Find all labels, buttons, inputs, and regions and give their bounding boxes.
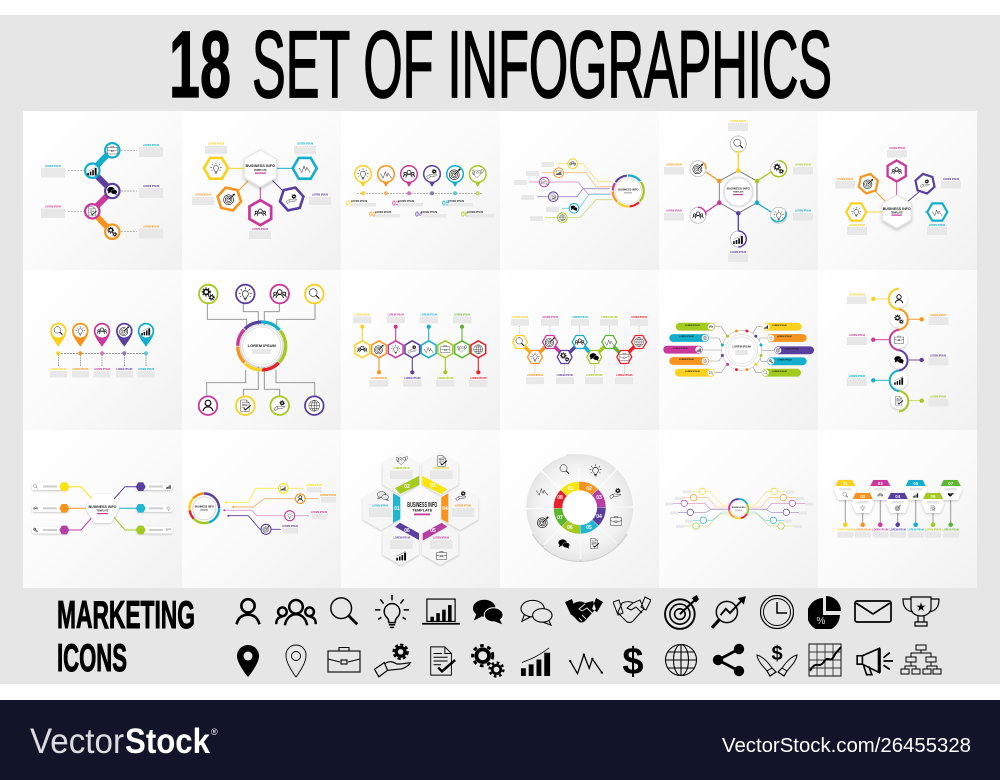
card 07 xyxy=(939,480,962,527)
panel: 1 snake circles xyxy=(23,111,182,270)
hex icons and text: LOREM IPSUM xyxy=(433,468,449,470)
pill labels: LOREM IPSUM xyxy=(685,371,700,373)
node: bars xyxy=(730,231,746,247)
text blocks: LOREM IPSUM xyxy=(889,148,905,150)
donut colored ring xyxy=(558,486,601,529)
sector icons xyxy=(536,464,622,549)
text blocks xyxy=(835,148,961,235)
panel: 7 map pins timeline xyxy=(23,270,182,430)
numbered notes: 04 xyxy=(415,212,423,218)
text blocks: LOREM IPSUM xyxy=(930,356,946,358)
panel: 13 hexagon with six branches xyxy=(23,430,182,588)
numbered notes: LOREM IPSUM xyxy=(375,212,391,214)
text blocks: LOREM IPSUM xyxy=(208,144,224,146)
text blocks: LOREM IPSUM xyxy=(116,369,132,371)
text blocks: LOREM IPSUM xyxy=(872,530,888,532)
hex icons and text xyxy=(369,456,474,560)
text blocks: LOREM IPSUM xyxy=(730,252,746,254)
central ring xyxy=(238,322,286,370)
right nodes xyxy=(770,488,796,529)
pill labels: LOREM IPSUM xyxy=(772,325,787,327)
center hexagon: BUSINESS INFO xyxy=(246,164,275,168)
text blocks xyxy=(837,530,959,538)
left pill bars xyxy=(663,323,715,377)
card 01 xyxy=(834,480,857,527)
text blocks xyxy=(847,294,948,406)
node: purple xyxy=(548,192,558,202)
text blocks: LOREM IPSUM xyxy=(908,530,924,532)
heading: marketing icons xyxy=(57,594,195,680)
text blocks: LOREM IPSUM xyxy=(354,314,370,316)
text blocks: LOREM IPSUM xyxy=(586,375,602,377)
node: zigzag xyxy=(927,203,947,221)
text blocks: LOREM IPSUM xyxy=(297,144,313,146)
node: bulb xyxy=(236,285,255,303)
node: bars xyxy=(85,164,100,178)
text blocks xyxy=(353,314,488,387)
hex icons and text: LOREM IPSUM xyxy=(394,538,410,540)
pin: zigzag xyxy=(378,166,394,195)
pin: bulb xyxy=(72,323,89,355)
panel: 6 hexagon fan xyxy=(818,111,977,270)
logo text: Vector xyxy=(30,722,124,761)
ring numbers: 01 xyxy=(568,486,573,492)
text blocks: LOREM IPSUM xyxy=(195,194,211,196)
white circles with icons xyxy=(890,290,908,409)
panel: 8 central ring with eight nodes xyxy=(182,270,341,430)
center title: TEMPLATE xyxy=(412,508,433,512)
node: team xyxy=(249,200,271,225)
hexagon cluster: 03 xyxy=(430,483,436,489)
panel: 18 hexagon cards with stems xyxy=(818,430,977,588)
pill labels: LOREM IPSUM xyxy=(685,325,700,327)
central ring xyxy=(729,499,748,518)
text blocks: LOREM IPSUM xyxy=(943,179,959,181)
node: target xyxy=(261,524,271,534)
hex icons and text: LOREM IPSUM xyxy=(455,506,471,508)
text blocks: LOREM IPSUM xyxy=(143,186,159,188)
node: bulb xyxy=(285,511,295,521)
node: orange xyxy=(554,168,564,178)
ring numbers: 03 xyxy=(596,495,602,501)
text blocks: LOREM IPSUM xyxy=(666,210,682,212)
center hexagon: BUSINESS INFO xyxy=(883,207,911,211)
node: bulb xyxy=(204,158,228,179)
card numbers: 02 xyxy=(860,494,866,499)
text blocks: LOREM IPSUM xyxy=(371,378,387,380)
text blocks: LOREM IPSUM xyxy=(631,317,647,319)
text blocks xyxy=(514,162,559,221)
node: target xyxy=(856,172,880,195)
text blocks: LOREM IPSUM xyxy=(252,229,268,231)
title xyxy=(169,12,832,118)
node: gears xyxy=(105,224,120,239)
numbered notes: LOREM IPSUM xyxy=(351,201,367,203)
panel: 17 double circuit ring xyxy=(659,430,818,588)
hexagon cluster: 06 xyxy=(404,528,410,534)
panel: 4 circuit lines to ring xyxy=(500,111,659,270)
node: yellow xyxy=(568,159,578,168)
center hexagon: TEMPLATE xyxy=(254,169,267,172)
ring numbers: 02 xyxy=(586,486,592,492)
ring numbers: 04 xyxy=(596,514,602,520)
numbered notes: 02 xyxy=(369,212,377,218)
card numbers: 05 xyxy=(913,481,919,486)
hexagon cluster: 04 xyxy=(442,506,448,512)
logo text: ® xyxy=(211,727,218,737)
card numbers: 07 xyxy=(948,481,954,486)
node: cyan xyxy=(569,204,579,213)
text blocks: LOREM IPSUM xyxy=(50,369,66,371)
numbered notes: LOREM IPSUM xyxy=(448,201,464,203)
node: team xyxy=(888,160,906,182)
hex icons and text: LOREM IPSUM xyxy=(433,538,449,540)
central ring: LOREM IPSUM xyxy=(248,343,276,348)
hex icons and text: LOREM IPSUM xyxy=(394,468,410,470)
text blocks: LOREM IPSUM xyxy=(45,166,61,168)
text blocks: LOREM IPSUM xyxy=(795,164,811,166)
pill labels: LOREM IPSUM xyxy=(777,360,792,362)
hexagon cluster: 05 xyxy=(430,528,436,534)
panel: 15 six white hexagons xyxy=(341,430,500,588)
text blocks: LOREM IPSUM xyxy=(849,376,865,378)
pill labels: LOREM IPSUM xyxy=(784,348,799,350)
donut outer sectors xyxy=(533,468,626,561)
text blocks: LOREM IPSUM xyxy=(601,317,617,319)
text blocks: LOREM IPSUM xyxy=(890,530,906,532)
numbered notes: 03 xyxy=(392,200,400,208)
text blocks: LOREM IPSUM xyxy=(572,317,588,319)
hexagon cluster: 02 xyxy=(404,484,410,490)
center hexagon xyxy=(719,171,757,213)
text blocks: LOREM IPSUM xyxy=(72,369,88,371)
node: team xyxy=(270,285,289,303)
pin: handshake xyxy=(469,166,486,195)
center hexagon xyxy=(86,494,119,523)
hexagon nodes xyxy=(717,168,759,216)
panel: 9 hexagon chain xyxy=(341,270,500,430)
node: document xyxy=(85,204,100,218)
text blocks xyxy=(665,490,813,528)
text blocks: LOREM IPSUM xyxy=(795,210,811,212)
right pills xyxy=(136,482,173,534)
ring numbers: 08 xyxy=(557,495,563,501)
text blocks: LOREM IPSUM xyxy=(320,495,336,497)
panel: 16 segmented donut xyxy=(500,430,659,588)
text blocks: LOREM IPSUM xyxy=(143,145,159,147)
wave arcs xyxy=(889,289,908,412)
card 06 xyxy=(922,493,944,527)
text blocks: LOREM IPSUM xyxy=(930,315,946,317)
central ring xyxy=(613,176,644,206)
card numbers: 03 xyxy=(878,481,883,486)
node: hand xyxy=(278,186,306,212)
panel: 2 hexagon star xyxy=(182,111,341,270)
text blocks: LOREM IPSUM xyxy=(929,225,945,227)
text blocks: LOREM IPSUM xyxy=(404,378,420,380)
node: globe xyxy=(305,396,324,415)
node: gears xyxy=(771,161,787,177)
text blocks: LOREM IPSUM xyxy=(512,317,528,319)
icon row 2 xyxy=(237,641,941,683)
hexagon cluster xyxy=(363,453,478,565)
pill labels: LOREM IPSUM xyxy=(777,336,792,338)
pill labels: LOREM IPSUM xyxy=(673,348,688,350)
pin: target xyxy=(447,166,463,195)
panel: 10 zigzag hexagons xyxy=(500,270,659,430)
text blocks xyxy=(511,317,648,384)
text blocks xyxy=(664,121,813,262)
text blocks xyxy=(192,144,331,239)
text blocks: LOREM IPSUM xyxy=(454,314,470,316)
pin: team xyxy=(94,323,110,355)
node: person xyxy=(296,494,305,504)
text blocks: LOREM IPSUM xyxy=(849,294,865,296)
hex icons and text: LOREM IPSUM xyxy=(372,506,388,508)
node: team xyxy=(690,207,706,223)
icon row 1 xyxy=(237,595,939,631)
node: hand xyxy=(913,172,937,195)
card numbers: 01 xyxy=(843,481,848,486)
pin: bars xyxy=(138,323,154,355)
text blocks: LOREM IPSUM xyxy=(311,512,327,514)
panel: 12 vertical wave circles xyxy=(818,270,977,430)
node: lime xyxy=(558,213,567,222)
text blocks: LOREM IPSUM xyxy=(94,369,110,371)
node: hand xyxy=(270,396,289,415)
central ring: LOREM IPSUM xyxy=(733,344,751,348)
node: target xyxy=(215,186,243,212)
text blocks xyxy=(41,145,163,238)
left pills xyxy=(32,482,69,534)
numbered notes: 05 xyxy=(442,200,450,208)
logo text xyxy=(30,722,218,761)
text blocks: LOREM IPSUM xyxy=(849,225,865,227)
pin: search xyxy=(50,323,67,355)
pill labels: LOREM IPSUM xyxy=(679,359,694,361)
right pill bars xyxy=(762,323,814,377)
text blocks: LOREM IPSUM xyxy=(930,396,946,398)
text blocks: LOREM IPSUM xyxy=(557,375,573,377)
center hexagon: TEMPLATE xyxy=(891,212,903,214)
node: zigzag xyxy=(293,158,317,179)
text blocks: LOREM IPSUM xyxy=(45,206,61,208)
footer stock id: VectorStock.com/26455328 xyxy=(722,735,971,757)
center title xyxy=(407,502,438,515)
text blocks xyxy=(50,369,154,378)
numbered notes xyxy=(346,200,494,218)
panel: 14 ring with four circuit lines xyxy=(182,430,341,588)
node: gears xyxy=(199,285,218,303)
pill labels: LOREM IPSUM xyxy=(679,336,694,338)
hexagon row xyxy=(512,336,646,363)
center hexagon: TEMPLATE xyxy=(96,510,109,512)
numbered notes: 06 xyxy=(461,212,469,218)
text blocks: LOREM IPSUM xyxy=(837,530,853,532)
footer band xyxy=(0,700,1000,780)
panel: 11 ring with pill bars xyxy=(659,270,818,430)
ring numbers: 07 xyxy=(557,515,563,521)
panel: 3 six round pins timeline xyxy=(341,111,500,270)
hexagon row xyxy=(355,341,486,358)
node: search xyxy=(730,136,746,152)
ring numbers xyxy=(557,486,602,531)
node: chat xyxy=(105,184,120,198)
numbered notes: LOREM IPSUM xyxy=(467,212,483,214)
text blocks: LOREM IPSUM xyxy=(925,530,941,532)
numbered notes: 01 xyxy=(346,200,354,208)
node: target xyxy=(690,161,706,177)
pill labels: LOREM IPSUM xyxy=(772,371,787,373)
text blocks: LOREM IPSUM xyxy=(306,485,322,487)
node: briefcase xyxy=(105,143,120,158)
text blocks: LOREM IPSUM xyxy=(849,335,865,337)
text blocks: LOREM IPSUM xyxy=(282,526,298,528)
node: laptop xyxy=(278,484,288,493)
card 03 xyxy=(869,480,892,527)
text blocks: LOREM IPSUM xyxy=(388,314,404,316)
text blocks xyxy=(282,485,336,534)
pin: team xyxy=(401,166,417,195)
card 02 xyxy=(851,493,874,527)
card 05 xyxy=(904,480,927,527)
heading: marketing icons: MARKETING xyxy=(57,594,195,637)
card numbers xyxy=(843,481,954,499)
node: document xyxy=(236,396,255,415)
text blocks: LOREM IPSUM xyxy=(943,530,959,532)
heading: marketing icons: ICONS xyxy=(57,637,127,680)
center hexagon xyxy=(882,195,911,228)
text blocks: LOREM IPSUM xyxy=(421,314,437,316)
center hexagon: BUSINESS INFO xyxy=(89,505,117,509)
text blocks: LOREM IPSUM xyxy=(855,530,871,532)
center hexagon: BUSINESS INFO xyxy=(727,186,751,190)
central ring: BUSINESS INFO xyxy=(195,506,214,508)
node: magenta xyxy=(540,177,549,187)
ring numbers: 05 xyxy=(586,525,592,531)
numbered notes: LOREM IPSUM xyxy=(398,201,414,203)
hexagon cluster: 01 xyxy=(394,506,400,512)
ring numbers: 06 xyxy=(567,525,573,531)
central ring xyxy=(721,330,762,371)
node: bulb xyxy=(771,207,787,223)
center title: BUSINESS INFO xyxy=(407,502,438,509)
title: 18 xyxy=(169,12,231,118)
text blocks: LOREM IPSUM xyxy=(837,179,853,181)
logo text: Stock xyxy=(125,722,210,761)
text blocks: LOREM IPSUM xyxy=(527,375,543,377)
text blocks: LOREM IPSUM xyxy=(616,375,632,377)
node: search xyxy=(305,285,324,303)
text blocks: LOREM IPSUM xyxy=(730,121,746,123)
left nodes xyxy=(681,488,706,529)
text blocks: LOREM IPSUM xyxy=(666,164,682,166)
text blocks: LOREM IPSUM xyxy=(143,226,159,228)
panel: 5 hexagon ring with six nodes xyxy=(659,111,818,270)
central ring: BUSINESS INFO xyxy=(732,507,746,509)
node: bulb xyxy=(846,203,866,221)
center hexagon xyxy=(244,150,276,187)
card numbers: 06 xyxy=(930,494,936,499)
central ring xyxy=(190,494,219,523)
central ring: BUSINESS INFO xyxy=(618,188,638,192)
text blocks: LOREM IPSUM xyxy=(437,378,453,380)
pin: hand xyxy=(424,166,440,195)
pill labels xyxy=(673,325,799,373)
center hexagon: TEMPLATE xyxy=(733,190,744,194)
text blocks: LOREM IPSUM xyxy=(312,194,328,196)
pin: bulb xyxy=(355,166,371,195)
text blocks: LOREM IPSUM xyxy=(542,317,558,319)
text blocks: LOREM IPSUM xyxy=(470,378,486,380)
numbered notes: LOREM IPSUM xyxy=(421,212,437,214)
card numbers: 04 xyxy=(895,494,901,499)
pin: target xyxy=(116,323,133,355)
card 04 xyxy=(886,493,909,527)
text blocks: LOREM IPSUM xyxy=(138,369,154,371)
node: person xyxy=(199,396,217,415)
